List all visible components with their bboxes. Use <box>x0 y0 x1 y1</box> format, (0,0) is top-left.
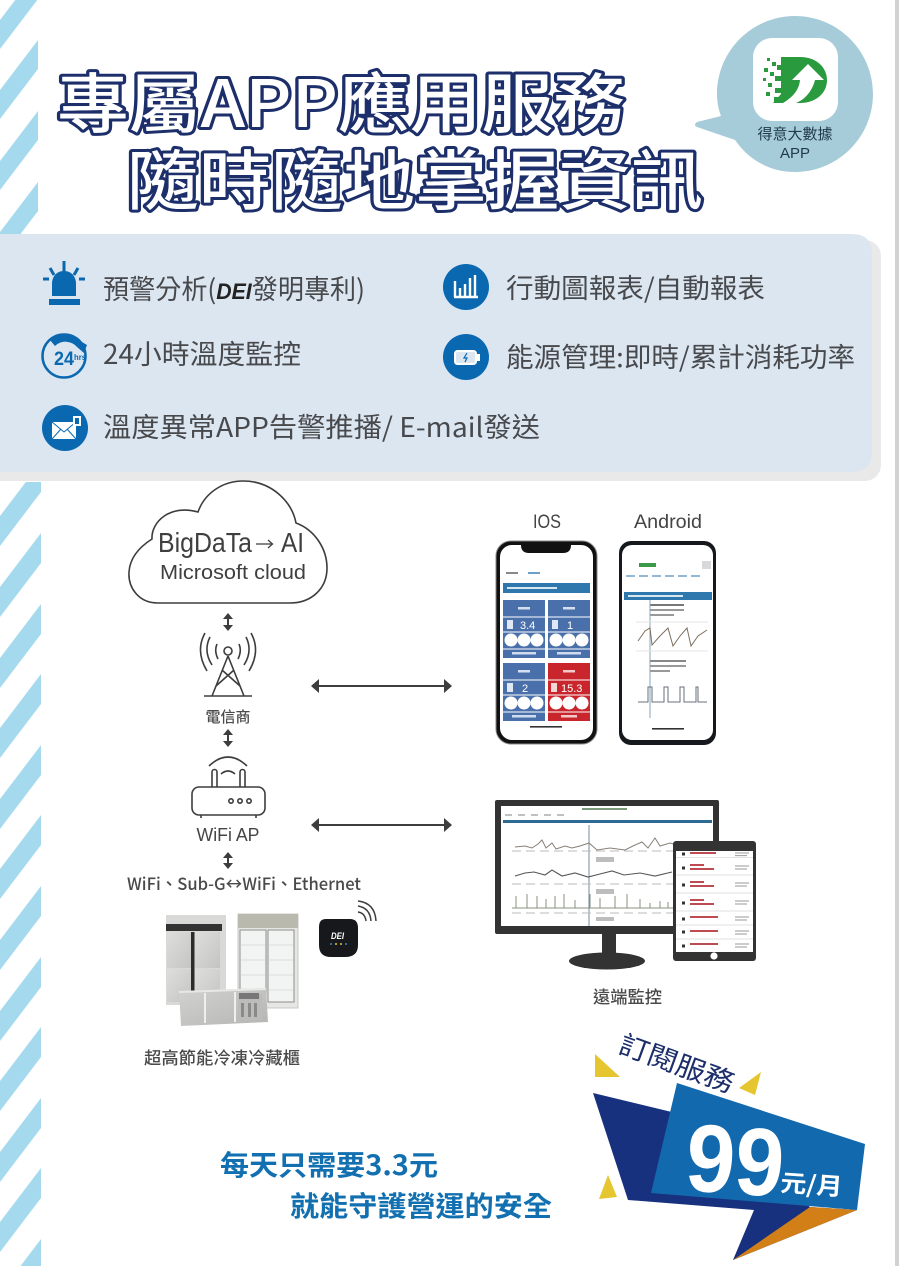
icon: mail <box>42 405 88 451</box>
title: 專屬APP應用服務 <box>57 52 625 146</box>
chart: power spikes <box>512 894 678 908</box>
status card: top left <box>503 600 545 658</box>
slogan: 每天只需要3.3元 <box>220 1144 438 1184</box>
status card: top left: 3.4 <box>520 620 535 632</box>
status card: bottom left: 2 <box>522 683 528 695</box>
phone: iOS <box>496 541 597 744</box>
image: refrigerators <box>166 914 298 1026</box>
icon: 24 hours clock <box>42 334 87 378</box>
icon: chart <box>443 264 489 310</box>
label: Android: Android <box>634 512 702 533</box>
monitor <box>495 800 719 970</box>
monitor stand <box>569 934 645 970</box>
arrow: router to protocols <box>223 852 233 869</box>
chart: sawtooth temperature <box>638 628 707 646</box>
chart: compressor pulses <box>638 687 707 702</box>
heading: subscribe: 訂閱服務 <box>614 1023 740 1101</box>
label: telecom: 電信商 <box>205 706 251 727</box>
app badge speech bubble <box>695 16 873 172</box>
status card: bottom right alarm <box>548 663 590 721</box>
title: 隨時隨地掌握資訊 <box>127 129 703 223</box>
fridge: four door <box>166 915 226 1005</box>
fridge: glass door <box>238 914 298 1008</box>
phone: Android <box>619 541 716 745</box>
arrow: cloud to tower <box>223 613 233 631</box>
label: iOS: IOS <box>533 512 561 533</box>
icon: cell tower <box>200 633 256 696</box>
icon: 24 hours clock: 24 <box>54 349 74 370</box>
title <box>57 52 703 223</box>
label: protocols: WiFi、Sub-G↔WiFi、Ethernet <box>127 870 361 895</box>
icon: alarm <box>43 261 85 305</box>
slogan <box>220 1144 552 1225</box>
status card: bottom right alarm: 15.3 <box>561 683 582 695</box>
price number: 99 <box>683 1104 788 1218</box>
feature text: energy management: 能源管理:即時/累計消耗功率 <box>506 336 855 375</box>
label: WiFi AP: WiFi AP <box>196 825 260 845</box>
arrow: router to monitors <box>311 818 452 832</box>
fridge: under counter <box>179 988 268 1026</box>
label: remote monitoring: 遠端監控 <box>593 983 662 1008</box>
badge label <box>757 123 833 162</box>
slogan: 就能守護營運的安全 <box>290 1185 552 1225</box>
feature text: alert push: 溫度異常APP告警推播/ E-mail發送 <box>103 406 540 445</box>
icon: gateway device <box>319 901 376 957</box>
chart: temperature line <box>515 838 680 850</box>
label: refrigerators: 超高節能冷凍冷藏櫃 <box>144 1044 300 1069</box>
arrow: tower to router <box>223 729 233 747</box>
icon: wifi router <box>192 757 265 818</box>
panel: features <box>0 234 881 481</box>
status card: top right <box>548 600 590 658</box>
chart: humidity line <box>515 870 672 877</box>
badge label: APP <box>780 145 810 162</box>
arrow: tower to phones <box>311 679 452 693</box>
status card: top right: 1 <box>567 620 573 632</box>
cloud <box>129 481 327 603</box>
cloud: Microsoft cloud <box>160 562 306 584</box>
icon: battery <box>443 334 489 380</box>
icon: gateway device: DEI <box>331 931 344 941</box>
icon: 24 hours clock: hrs <box>74 353 87 362</box>
yellow triangles <box>595 1054 761 1199</box>
feature text: warning analysis: 預警分析(DEI發明專利) <box>103 268 365 307</box>
tablet <box>673 841 756 961</box>
icon: app logo <box>753 38 838 121</box>
status card: bottom left <box>503 663 545 721</box>
feature text: mobile charts: 行動圖報表/自動報表 <box>506 267 765 306</box>
feature text: 24h monitoring: 24小時溫度監控 <box>103 333 301 372</box>
badge label: 得意大數據 <box>757 123 833 144</box>
cloud: AI <box>281 527 304 558</box>
price unit: 元/月 <box>780 1163 844 1202</box>
cloud: BigDaTa <box>158 527 252 558</box>
promo badge: subscription price <box>593 1023 865 1260</box>
alert list <box>676 853 753 947</box>
